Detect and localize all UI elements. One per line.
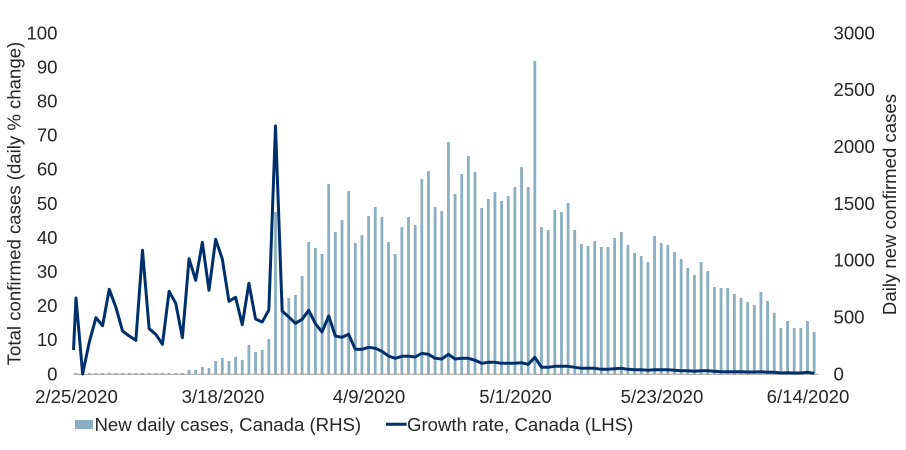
x axis date labels: 6/14/2020 xyxy=(767,386,849,407)
right axis tick labels: 1000 xyxy=(834,250,875,271)
left axis tick labels: 80 xyxy=(37,90,58,112)
x axis date labels: 4/9/2020 xyxy=(333,386,405,407)
right axis tick labels: 1500 xyxy=(834,193,875,214)
x axis date labels: 5/1/2020 xyxy=(479,386,552,407)
left axis tick labels: 30 xyxy=(37,261,58,282)
right axis tick labels: 3000 xyxy=(834,22,875,43)
x axis date labels: 2/25/2020 xyxy=(35,386,118,407)
legend xyxy=(75,414,633,435)
legend label: new daily cases: New daily cases, Canada (RHS) xyxy=(94,414,361,435)
left axis tick labels: 100 xyxy=(26,22,58,43)
right axis tick labels: 2000 xyxy=(834,136,875,157)
x axis date labels xyxy=(35,386,849,407)
left axis tick labels: 90 xyxy=(37,56,58,77)
x axis baseline xyxy=(73,373,818,375)
legend swatch: new daily cases xyxy=(75,420,93,429)
left axis tick labels: 50 xyxy=(37,193,58,214)
bars: new daily cases xyxy=(76,61,814,374)
right axis tick labels: 500 xyxy=(834,306,865,327)
left axis tick labels: 70 xyxy=(37,125,58,146)
right axis title: Daily new confirmed cases xyxy=(879,94,900,315)
right axis tick labels: 0 xyxy=(834,363,844,384)
left axis tick labels: 40 xyxy=(37,227,58,248)
legend swatch: growth rate xyxy=(386,423,407,426)
left axis tick labels: 0 xyxy=(47,363,58,384)
line: growth rate xyxy=(74,126,814,374)
left axis title: Total confirmed cases (daily % change) xyxy=(4,42,24,365)
left axis tick labels xyxy=(26,22,58,384)
x axis date labels: 3/18/2020 xyxy=(182,386,264,407)
x axis date labels: 5/23/2020 xyxy=(621,386,703,407)
left axis tick labels: 60 xyxy=(37,159,58,180)
left axis tick labels: 20 xyxy=(37,295,58,316)
left axis tick labels: 10 xyxy=(37,329,58,350)
right axis tick labels xyxy=(834,22,875,384)
right axis tick labels: 2500 xyxy=(834,79,875,100)
legend label: growth rate: Growth rate, Canada (LHS) xyxy=(407,414,633,435)
